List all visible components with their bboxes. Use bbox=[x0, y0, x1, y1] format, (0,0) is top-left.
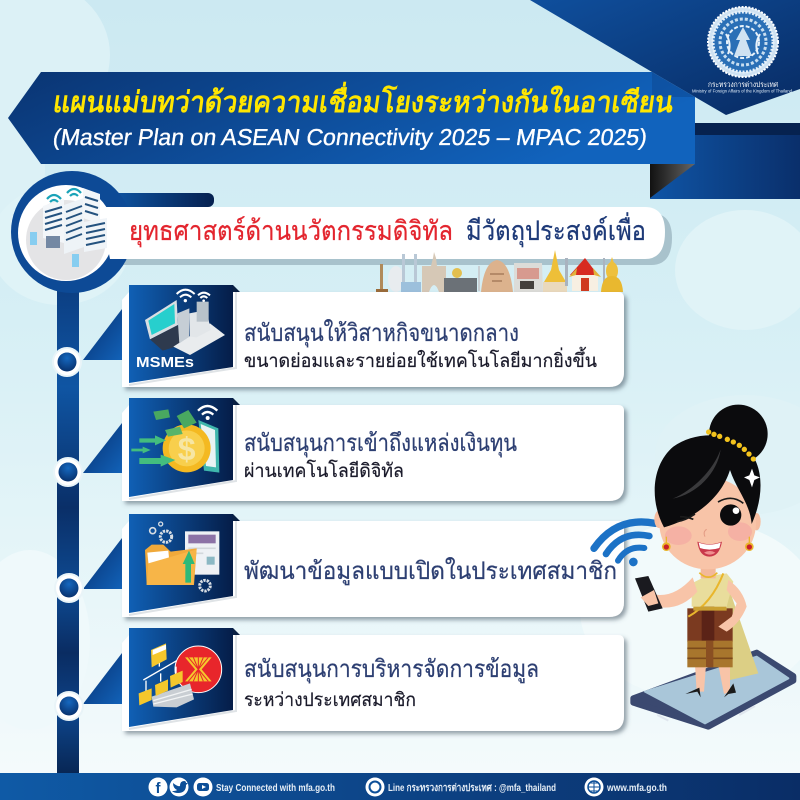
footer bar bbox=[0, 773, 800, 800]
item heading: สนับสนุนการเข้าถึงแหล่งเงินทุน bbox=[244, 430, 517, 458]
title Thai: แผนแม่บทว่าด้วยความเชื่อมโยงระหว่างกันในอาเซียน bbox=[51, 81, 676, 119]
logo: Ministry of Foreign Affairs seal bbox=[692, 7, 792, 94]
ring bbox=[11, 171, 133, 293]
icon: facebook bbox=[148, 778, 168, 797]
section heading bbox=[11, 171, 672, 293]
timeline rail bbox=[57, 290, 79, 774]
social text: Stay Connected with mfa.go.th bbox=[216, 783, 335, 794]
node bbox=[55, 574, 83, 602]
item heading: พัฒนาข้อมูลแบบเปิดในประเทศสมาชิก bbox=[244, 557, 617, 586]
connector bbox=[83, 423, 122, 473]
ministry name: กระทรวงการต่างประเทศ bbox=[708, 80, 778, 89]
tablet bbox=[633, 653, 793, 727]
icon: laptop and city bbox=[145, 290, 225, 355]
label MSMEs: MSMEs bbox=[136, 354, 194, 371]
card bbox=[122, 405, 624, 501]
item detail: ขนาดย่อมและรายย่อยใช้เทคโนโลยีมากยิ่งขึ้น bbox=[244, 347, 597, 372]
website text: www.mfa.go.th bbox=[606, 783, 667, 794]
icon panel bbox=[129, 398, 240, 499]
line text: Line กระทรวงการต่างประเทศ : @mfa_thailand bbox=[388, 782, 556, 794]
pill shadow bbox=[96, 213, 672, 265]
icon: folder and gears bbox=[145, 522, 219, 591]
title banner bbox=[8, 72, 695, 164]
icon: data centre bbox=[30, 188, 107, 267]
illustration: ASEAN landmarks bbox=[376, 250, 623, 292]
top-right ribbon bbox=[530, 0, 800, 115]
head bbox=[654, 405, 768, 569]
icon panel bbox=[129, 514, 240, 615]
heading text navy: มีวัตถุประสงค์เพื่อ bbox=[466, 212, 646, 248]
icon panel bbox=[129, 628, 240, 729]
card bbox=[122, 521, 624, 617]
timeline item 3 bbox=[55, 514, 624, 617]
node bbox=[54, 458, 82, 486]
item heading: สนับสนุนการบริหารจัดการข้อมูล bbox=[244, 656, 539, 684]
ministry name English: Ministry of Foreign Affairs of the Kingdom of Thailand bbox=[692, 88, 792, 94]
icon: money and phone: $ bbox=[178, 431, 196, 467]
node bbox=[53, 348, 81, 376]
icon: youtube bbox=[194, 778, 212, 796]
illustration: woman in Thai dress on tablet bbox=[594, 405, 793, 727]
timeline item 1 bbox=[53, 285, 624, 387]
icon: globe bbox=[584, 778, 604, 796]
item detail: ระหว่างประเทศสมาชิก bbox=[244, 690, 416, 711]
node bbox=[55, 692, 83, 720]
figure bbox=[635, 562, 758, 697]
icon: line bbox=[366, 778, 384, 796]
icon panel bbox=[129, 285, 240, 385]
connector bbox=[83, 653, 122, 704]
connector bbox=[83, 309, 122, 360]
icon: wifi bbox=[594, 522, 655, 566]
card bbox=[122, 635, 624, 731]
icon: ASEAN data folders bbox=[139, 643, 222, 707]
connector bbox=[83, 538, 122, 589]
heading text red: ยุทธศาสตร์ด้านนวัตกรรมดิจิทัล bbox=[129, 215, 453, 248]
heading pill bbox=[90, 207, 665, 259]
timeline item 4 bbox=[55, 628, 624, 731]
item detail: ผ่านเทคโนโลยีดิจิทัล bbox=[244, 459, 404, 482]
item heading: สนับสนุนให้วิสาหกิจขนาดกลาง bbox=[244, 319, 519, 348]
heading bar bbox=[90, 193, 214, 207]
card bbox=[122, 292, 624, 387]
icon: facebook: f bbox=[156, 780, 162, 797]
timeline item 2 bbox=[54, 398, 624, 501]
title English: (Master Plan on ASEAN Connectivity 2025 – MPAC 2025) bbox=[51, 124, 649, 150]
icon: twitter bbox=[170, 778, 188, 796]
lower ribbon behind banner bbox=[650, 123, 800, 199]
